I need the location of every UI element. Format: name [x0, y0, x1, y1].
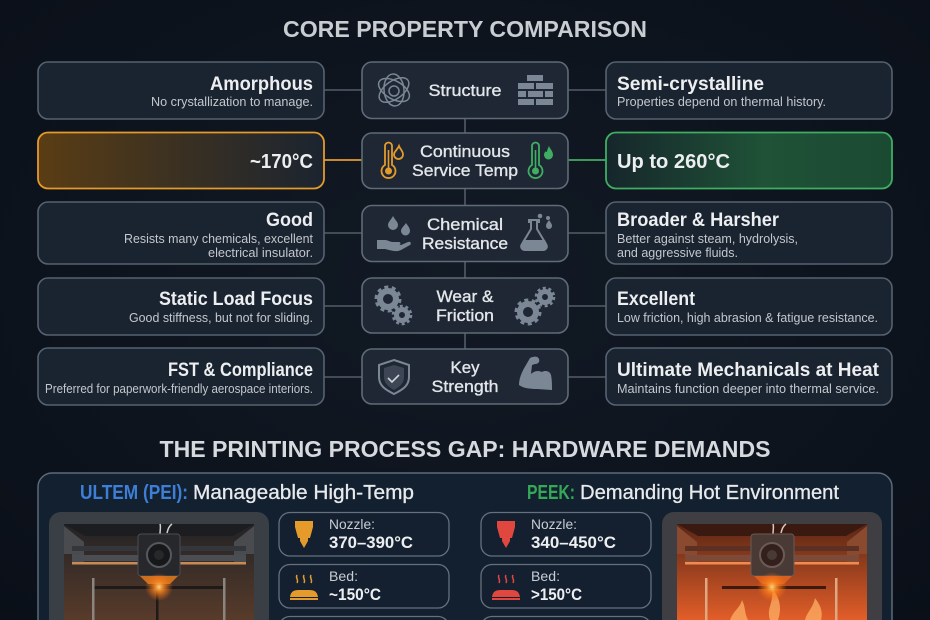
panel: excellent: Excellent — [617, 289, 696, 310]
panel: broader — [606, 202, 892, 264]
row: wear — [38, 278, 892, 335]
panel: service temp label — [362, 133, 568, 188]
panel: static load: Good stiffness, but not for sliding. — [129, 311, 313, 325]
panel: good — [38, 202, 324, 264]
panel: excellent — [606, 278, 892, 335]
heading: peek: PEEK: — [527, 482, 575, 504]
panel: amorphous — [38, 62, 324, 119]
card: ultem nozzle: Nozzle: — [329, 516, 375, 532]
card: ultem bed: Bed: — [329, 568, 358, 584]
card: ultem chamber — [279, 616, 449, 620]
panel: good: electrical insulator. — [208, 246, 313, 260]
panel: wear label: Friction — [436, 306, 494, 325]
card: peek chamber — [481, 616, 651, 620]
panel: amorphous: No crystallization to manage. — [151, 95, 313, 109]
panel: peek temp: Up to 260°C — [617, 151, 730, 173]
printer: ultem — [49, 512, 269, 620]
panel: broader: and aggressive fluids. — [617, 246, 738, 260]
panel: static load: Static Load Focus — [159, 289, 313, 310]
panel: key strength label: Strength — [432, 377, 498, 396]
panel: chemical label: Chemical — [427, 215, 503, 234]
panel: structure label: Structure — [428, 81, 502, 100]
panel: chemical label: Resistance — [422, 234, 508, 253]
row: chemical — [38, 202, 892, 264]
panel: semi-crystalline: Properties depend on thermal history. — [617, 95, 826, 109]
panel: fst: Preferred for paperwork-friendly aerospace interiors. — [45, 382, 313, 396]
card: peek nozzle — [481, 512, 651, 556]
card: ultem bed — [279, 564, 449, 608]
panel: hardware demands — [38, 473, 892, 620]
panel: good: Resists many chemicals, excellent — [124, 232, 314, 246]
panel: key strength label — [362, 349, 568, 404]
card: ultem bed: ~150°C — [329, 586, 381, 604]
panel: ultem temp: ~170°C — [250, 151, 313, 173]
panel: broader: Broader & Harsher — [617, 210, 780, 231]
panel: chemical label — [362, 206, 568, 262]
panel: fst — [38, 348, 324, 405]
panel: service temp label: Service Temp — [412, 161, 518, 180]
panel: good: Good — [266, 210, 313, 231]
card: peek nozzle: Nozzle: — [531, 516, 577, 532]
panel: ultimate mechanicals: Maintains function deeper into thermal service. — [617, 382, 879, 396]
panel: wear label: Wear & — [436, 287, 494, 306]
card: peek bed — [481, 564, 651, 608]
card: peek bed: >150°C — [531, 586, 582, 604]
printer: peek — [662, 512, 882, 620]
panel: ultimate mechanicals: Ultimate Mechanicals at Heat — [617, 360, 880, 381]
panel: static load — [38, 278, 324, 335]
row: structure — [38, 62, 892, 119]
card: peek bed: Bed: — [531, 568, 560, 584]
row: service temp — [38, 132, 892, 188]
panel: amorphous: Amorphous — [210, 74, 313, 95]
heading: ultem: Manageable High-Temp — [193, 482, 414, 504]
title: CORE PROPERTY COMPARISON — [283, 16, 647, 42]
panel: ultem temp — [38, 132, 324, 188]
panel: service temp label: Continuous — [420, 142, 510, 161]
row: key strength — [38, 348, 892, 405]
card: peek nozzle: 340–450°C — [531, 534, 616, 552]
panel: excellent: Low friction, high abrasion & fatigue resistance. — [617, 311, 878, 325]
panel: semi-crystalline — [606, 62, 892, 119]
panel: wear label — [362, 278, 568, 333]
panel: key strength label: Key — [450, 358, 480, 377]
panel: semi-crystalline: Semi-crystalline — [617, 74, 764, 95]
panel: broader: Better against steam, hydrolysis, — [617, 232, 798, 246]
panel: ultimate mechanicals — [606, 348, 892, 405]
panel: structure label — [362, 62, 568, 118]
heading: ultem — [80, 482, 414, 504]
section heading: THE PRINTING PROCESS GAP: HARDWARE DEMANDS — [160, 436, 770, 462]
heading: ultem: ULTEM (PEI): — [80, 482, 188, 504]
card: ultem nozzle — [279, 512, 449, 556]
card: ultem nozzle: 370–390°C — [329, 534, 413, 552]
panel: fst: FST & Compliance — [168, 360, 313, 381]
heading: peek: Demanding Hot Environment — [580, 482, 839, 504]
panel: peek temp — [606, 132, 892, 188]
